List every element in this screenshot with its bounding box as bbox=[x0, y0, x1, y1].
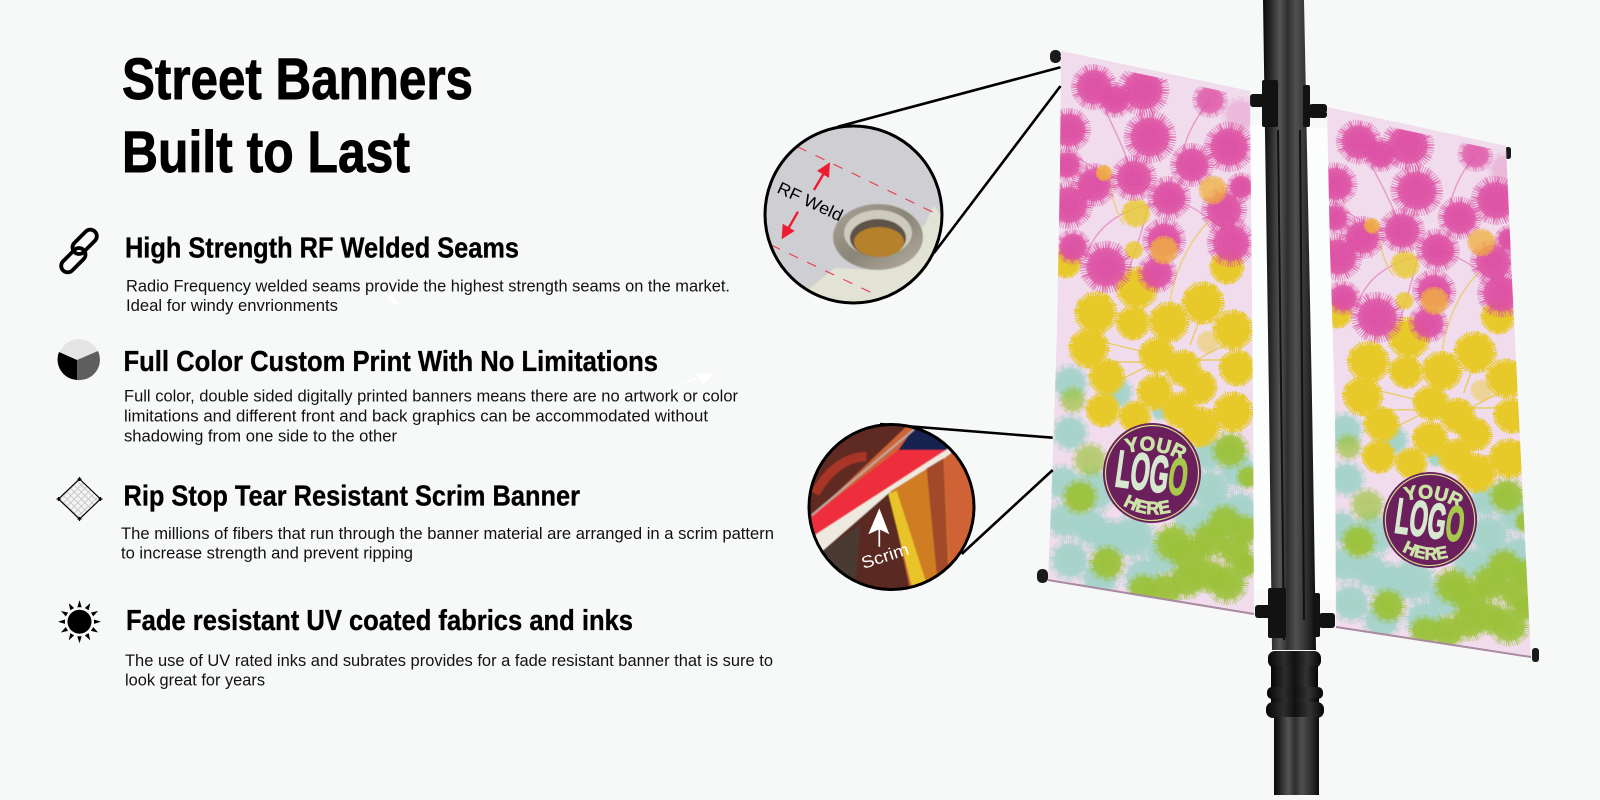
feature: RF welded seams bbox=[55, 227, 730, 315]
text: scrim description: The millions of fibers that run through the banner material are arranged in a scrim pattern bbox=[121, 524, 774, 543]
photo: grommet bbox=[766, 128, 940, 302]
text: full color description: limitations and different front and back graphics can be accommodated without bbox=[124, 407, 708, 426]
label: RF Weld: RF Weld bbox=[774, 178, 846, 225]
callout leader lines bbox=[838, 67, 1060, 253]
banner hems bbox=[1061, 54, 1250, 94]
feature: rip stop scrim bbox=[56, 477, 774, 563]
text: full color description bbox=[124, 387, 738, 446]
heading: rip stop: Rip Stop Tear Resistant Scrim Banner bbox=[124, 480, 580, 512]
title: Street Banners bbox=[122, 47, 473, 112]
photo: banner cross section bbox=[810, 426, 972, 588]
logo badge bbox=[1382, 472, 1478, 568]
icon: color circle bbox=[58, 339, 100, 380]
mounting brackets bbox=[1250, 80, 1335, 638]
white gaps beside pole bbox=[1250, 125, 1336, 600]
callout leader lines bbox=[880, 424, 1053, 554]
callout ring bbox=[765, 126, 942, 303]
lower right bracket bbox=[1313, 593, 1335, 637]
text: fade description: look great for years bbox=[125, 671, 265, 690]
banner fabric bbox=[1048, 52, 1254, 615]
street pole bbox=[1263, 0, 1324, 795]
heading: fade resistant: Fade resistant UV coated fabrics and inks bbox=[126, 605, 633, 637]
stray white arrows bbox=[385, 293, 714, 388]
red weld arrows bbox=[782, 162, 830, 239]
feature: full color print bbox=[58, 339, 738, 446]
text: fade description: The use of UV rated inks and subrates provides for a fade resistant banner that is sure to bbox=[125, 651, 773, 670]
pole collar rings bbox=[1266, 651, 1324, 718]
logo badge: HERE bbox=[1402, 540, 1448, 560]
callout: scrim detail bbox=[803, 420, 1053, 597]
callout: RF weld detail bbox=[755, 67, 1060, 315]
logo badge: LOGO bbox=[1112, 440, 1192, 508]
logo badge: YOUR bbox=[1402, 484, 1463, 506]
callout ring bbox=[809, 424, 974, 590]
right banner bbox=[1326, 107, 1539, 662]
pole shaft bbox=[1263, 0, 1316, 650]
label: Scrim: Scrim bbox=[859, 540, 911, 573]
left banner bbox=[1037, 50, 1254, 615]
banner floral print bbox=[1048, 64, 1254, 606]
logo badge: LOGO bbox=[1392, 488, 1468, 553]
text: full color description: shadowing from one side to the other bbox=[124, 426, 397, 446]
text: scrim description: to increase strength and prevent ripping bbox=[121, 544, 413, 563]
lower left bracket bbox=[1255, 588, 1286, 638]
text: fade description bbox=[125, 651, 773, 690]
text: seams description: Radio Frequency welded seams provide the highest strength seams on the market. bbox=[126, 276, 730, 296]
upper left bracket bbox=[1250, 80, 1278, 127]
banner floral print bbox=[1328, 120, 1530, 648]
icon: scrim diamond bbox=[56, 477, 102, 521]
text: scrim description bbox=[121, 524, 774, 563]
text: seams description bbox=[126, 276, 730, 315]
text: seams description: Ideal for windy envrionments bbox=[126, 296, 338, 315]
logo badge: HERE bbox=[1123, 494, 1171, 515]
upper right bracket bbox=[1303, 85, 1327, 127]
logo badge bbox=[1103, 423, 1201, 523]
heading: full color: Full Color Custom Print With No Limitations bbox=[124, 346, 658, 378]
logo badge: YOUR bbox=[1124, 436, 1186, 458]
pole base shaft bbox=[1274, 717, 1319, 795]
end caps right banner bbox=[1505, 147, 1539, 662]
title: Built to Last bbox=[122, 120, 410, 185]
icon: chain link bbox=[55, 227, 103, 275]
pole channel details bbox=[1278, 130, 1304, 640]
feature: fade resistant bbox=[58, 600, 773, 690]
title bbox=[122, 47, 473, 185]
heading: high strength seams: High Strength RF Welded Seams bbox=[125, 232, 519, 264]
banner fabric bbox=[1327, 108, 1531, 658]
text: full color description: Full color, double sided digitally printed banners means there are no artwork or color bbox=[124, 387, 738, 406]
banner hems bbox=[1327, 110, 1506, 149]
icon: sun bbox=[58, 600, 101, 643]
end caps left banner bbox=[1037, 50, 1061, 583]
